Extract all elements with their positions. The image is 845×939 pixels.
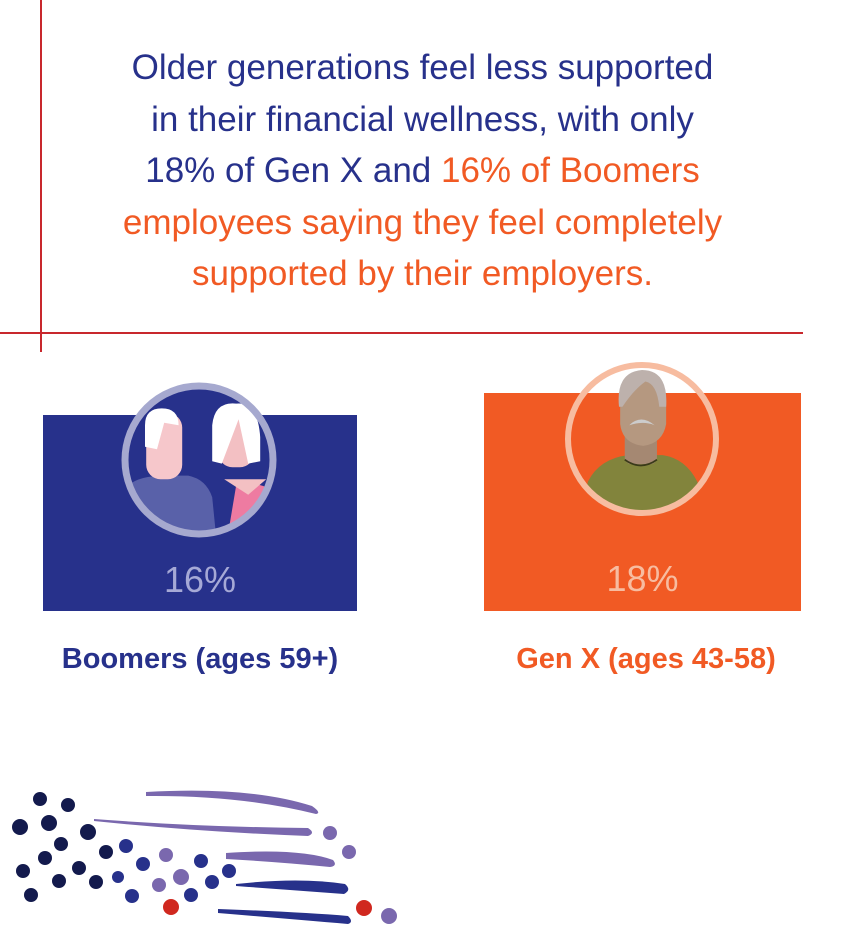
boomers label: Boomers (ages 59+) (62, 643, 338, 675)
title: 18% of Gen X and 16% of Boomers (145, 151, 700, 190)
panel: gen x (484, 362, 801, 611)
horizontal red line (0, 332, 803, 334)
gen x box (484, 393, 801, 611)
title: in their financial wellness, with only (151, 100, 694, 138)
panel: boomers (43, 382, 357, 611)
title: Older generations feel less supported (132, 48, 713, 87)
decoration: dots and streaks (12, 790, 397, 924)
icon: boomers couple (122, 382, 276, 538)
icon: gen x man (565, 362, 719, 516)
gen x percentage: 18% (606, 558, 679, 599)
title (123, 48, 722, 293)
boomers percentage: 16% (164, 559, 236, 600)
title: supported by their employers. (192, 254, 653, 293)
vertical red line (40, 0, 42, 352)
gen x label: Gen X (ages 43-58) (516, 643, 776, 675)
title: employees saying they feel completely (123, 202, 722, 242)
boomers box (43, 415, 357, 611)
